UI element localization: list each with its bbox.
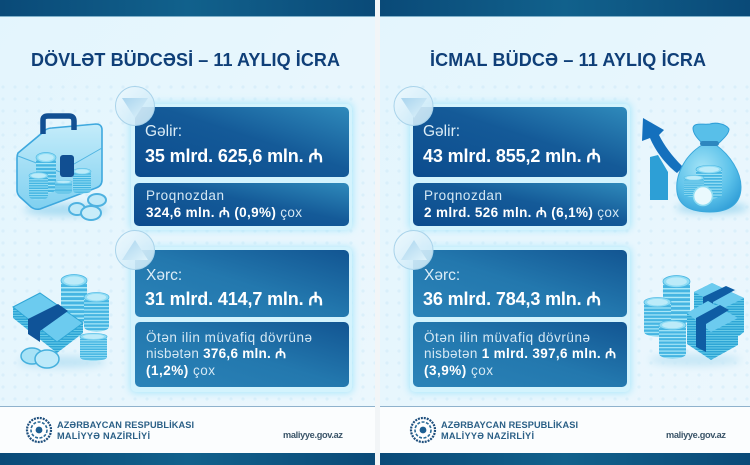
expense total box (135, 250, 349, 317)
expense total box: Xərc: (424, 267, 460, 284)
icon: emblem (27, 418, 51, 442)
footer: ministry: AZƏRBAYCAN RESPUBLİKASI (441, 420, 578, 430)
icon: emblem (411, 418, 435, 442)
revenue total box (135, 107, 349, 177)
expense comparison box: Ötən ilin müvafiq dövrünə (146, 330, 312, 345)
footer: ministry (0, 406, 375, 465)
revenue total box: 35 mlrd. 625,6 mln. ₼ (145, 146, 323, 166)
expense comparison box: Ötən ilin müvafiq dövrünə (424, 330, 590, 345)
expense total box: 31 mlrd. 414,7 mln. ₼ (145, 289, 323, 309)
expense total box: 36 mlrd. 784,3 mln. ₼ (423, 289, 601, 309)
revenue vs forecast box: 324,6 mln. ₼ (0,9%) çox (146, 205, 302, 220)
revenue vs forecast box (134, 183, 349, 226)
icon: briefcase with coins (17, 116, 108, 220)
footer: ministry: AZƏRBAYCAN RESPUBLİKASI (57, 420, 194, 430)
expense comparison box: (1,2%) çox (146, 363, 215, 378)
revenue total box (413, 107, 627, 177)
revenue total box: 43 mlrd. 855,2 mln. ₼ (423, 146, 601, 166)
expense total box: Xərc: (146, 267, 182, 284)
expense comparison box: nisbətən 376,6 mln. ₼ (146, 346, 286, 361)
title: state budget: DÖVLƏT BÜDCƏSİ – 11 AYLIQ İCRA (31, 50, 340, 70)
revenue vs forecast box: Proqnozdan (146, 188, 224, 203)
panel: state budget (0, 0, 375, 465)
revenue total box: Gəlir: (423, 123, 460, 140)
icon: down arrow badge (394, 86, 433, 126)
expense comparison box (413, 322, 627, 387)
icon: cash and coins (13, 275, 109, 368)
panel: consolidated budget (380, 0, 750, 465)
revenue vs forecast box: 2 mlrd. 526 mln. ₼ (6,1%) çox (424, 205, 619, 220)
icon: down arrow badge (116, 86, 154, 126)
footer: ministry: MALİYYƏ NAZİRLİYİ (57, 431, 150, 441)
expense comparison box (135, 322, 349, 387)
icon: up arrow badge (116, 230, 154, 270)
panel: revenue card (409, 103, 631, 230)
icon: money bag with growth arrow (642, 118, 748, 214)
footer: ministry (380, 406, 750, 465)
icon: up arrow badge (394, 230, 433, 270)
expense comparison box: (3,9%) çox (424, 363, 493, 378)
revenue total box: Gəlir: (145, 123, 182, 140)
expense total box (413, 250, 627, 317)
panel: expense card (409, 247, 631, 393)
footer: ministry: maliyye.gov.az (283, 430, 343, 440)
panel: expense card (130, 247, 353, 393)
revenue vs forecast box (413, 183, 627, 226)
icon: coins and cash cubes (644, 276, 744, 366)
panel: revenue card (130, 103, 353, 230)
revenue vs forecast box: Proqnozdan (424, 188, 502, 203)
footer: ministry: MALİYYƏ NAZİRLİYİ (441, 431, 534, 441)
expense comparison box: nisbətən 1 mlrd. 397,6 mln. ₼ (424, 346, 616, 361)
footer: ministry: maliyye.gov.az (666, 430, 726, 440)
title: consolidated budget: İCMAL BÜDCƏ – 11 AYLIQ İCRA (430, 50, 706, 70)
